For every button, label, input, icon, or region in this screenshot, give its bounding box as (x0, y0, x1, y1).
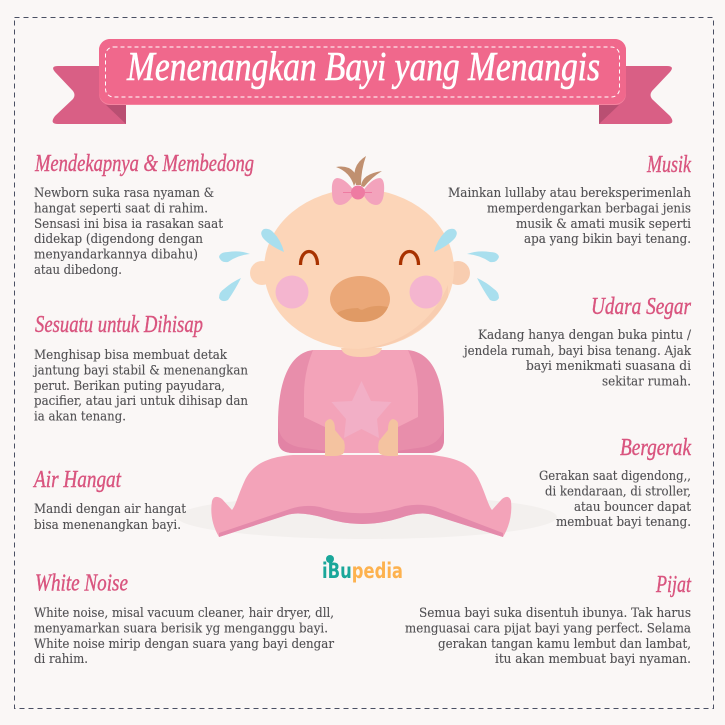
text block: menguasai cara pijat bayi yang perfect. Selama (405, 622, 691, 636)
text block: apa yang bikin bayi tenang. (524, 232, 691, 247)
text block: Semua bayi suka disentuh ibunya. Tak harus (419, 606, 691, 621)
panel: Sesuatu untuk Dihisap (32, 312, 248, 424)
panel: Mendekapnya & Membedong (34, 151, 254, 278)
panel: Pijat (405, 572, 692, 667)
text block (34, 186, 224, 278)
mouth (330, 276, 390, 322)
text block: di rahim. (34, 652, 88, 667)
heading: Udara Segar (591, 294, 692, 320)
panel: Musik (448, 152, 691, 247)
text block: menyamarkan suara berisik yg menganggu bayi. (34, 622, 328, 636)
text block: membuat bayi tenang. (556, 515, 691, 530)
text block: hangat seperti saat di rahim. (34, 202, 208, 216)
text block: di kendaraan, di stroller, (545, 484, 691, 500)
hands (325, 419, 398, 456)
text block: Newborn suka rasa nyaman & (34, 186, 214, 201)
ribbon main band (99, 39, 626, 105)
panel: Air Hangat (32, 467, 187, 533)
heading: Mendekapnya & Membedong (34, 151, 254, 177)
baby illustration (177, 156, 557, 539)
heading: Musik (646, 152, 691, 178)
eyes (300, 252, 418, 265)
text block: atau bouncer dapat (574, 500, 692, 515)
text block: White noise, misal vacuum cleaner, hair dryer, dll, (34, 606, 334, 621)
text block (448, 186, 691, 247)
text block: atau dibedong. (34, 263, 122, 278)
text block: White noise mirip dengan suara yang bayi dengar (34, 637, 335, 652)
text block (539, 469, 692, 530)
heading: Pijat (655, 572, 692, 598)
text block: Sensasi ini bisa ia rasakan saat (34, 217, 224, 232)
text block: Gerakan saat digendong,, (539, 469, 691, 484)
heading: White Noise (35, 570, 128, 596)
ears (250, 261, 274, 285)
text block: ia akan tenang. (34, 410, 126, 424)
ribbon tail right (599, 66, 672, 124)
text block: sekitar rumah. (602, 374, 691, 390)
cheeks (276, 276, 308, 308)
panel: Udara Segar (462, 294, 692, 390)
star (332, 381, 392, 438)
text block: memperdengarkan berbagai jenis (487, 202, 691, 216)
ribbon tail left (53, 66, 126, 124)
heading: Bergerak (620, 435, 691, 461)
text block: jendela rumah, bayi bisa tenang. Ajak (462, 344, 692, 359)
text block: Kadang hanya dengan buka pintu / (478, 328, 691, 343)
text block: Mandi dengan air hangat (34, 502, 187, 517)
text block: pacifier, atau jari untuk dihisap dan (34, 394, 248, 409)
logo: iBupedia: iBupedia (322, 559, 403, 583)
heading: Air Hangat (32, 467, 122, 493)
text block (405, 606, 691, 667)
hair (336, 156, 382, 187)
text block: bisa menenangkan bayi. (34, 518, 181, 533)
bow (332, 178, 384, 205)
panel: Bergerak (539, 435, 692, 530)
title banner (53, 39, 672, 124)
text block (34, 502, 187, 533)
text block: bayi menikmati suasana di (526, 359, 691, 374)
text block: didekap (digendong dengan (34, 232, 203, 247)
text block (462, 328, 692, 390)
baby head (219, 156, 499, 349)
text block: musik & amati musik seperti (516, 217, 691, 232)
text block: perut. Berikan puting payudara, (34, 379, 225, 394)
ground shadow (177, 495, 557, 539)
title text: Menenangkan Bayi yang Menangis (126, 43, 600, 89)
tears (219, 229, 499, 301)
neck (341, 348, 382, 357)
text block: Menghisap bisa membuat detak (34, 348, 228, 363)
text block: gerakan tangan kamu lembut dan lambat, (438, 637, 691, 652)
heading: Sesuatu untuk Dihisap (35, 312, 203, 338)
text block: jantung bayi stabil & menenangkan (32, 364, 248, 378)
baby body (211, 348, 511, 537)
panel: White Noise (34, 570, 335, 667)
text block: Mainkan lullaby atau bereksperimenlah (448, 186, 691, 201)
dress (211, 455, 511, 537)
text block (32, 348, 248, 424)
dress hem (219, 505, 503, 537)
text block (34, 606, 335, 667)
text block: menyandarkannya dibahu) (34, 248, 198, 262)
text block: itu akan membuat bayi nyaman. (495, 652, 691, 667)
